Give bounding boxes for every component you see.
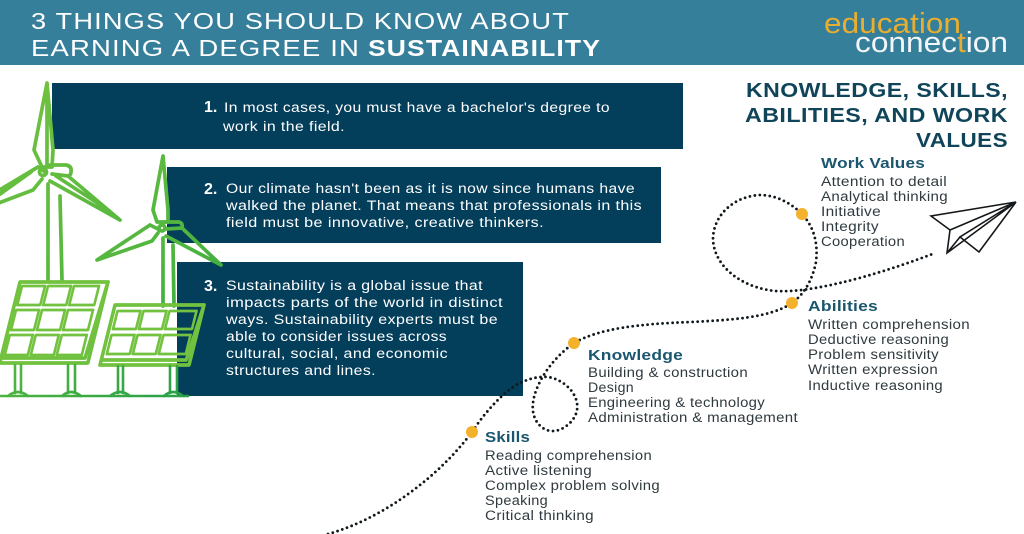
panel: fact 1: In most cases, you must have a bachelor's degree to bbox=[224, 100, 610, 115]
list: abilities: Deductive reasoning bbox=[808, 332, 949, 347]
panel: fact 3: Sustainability is a global issue that bbox=[226, 278, 483, 293]
panel: fact 3: able to consider issues across bbox=[226, 329, 447, 344]
logo: education connection: connec tion bbox=[855, 27, 1008, 59]
panel: fact 2: field must be innovative, creative thinkers. bbox=[226, 215, 544, 230]
list: skills: Reading comprehension bbox=[485, 448, 652, 463]
list: skills: Critical thinking bbox=[485, 508, 594, 523]
logo: education connection bbox=[824, 8, 1008, 59]
list: skills: Speaking bbox=[485, 493, 548, 508]
panel: fact 3: cultural, social, and economic bbox=[226, 346, 448, 361]
list: knowledge: Building & construction bbox=[588, 365, 748, 380]
heading: knowledge, skills, abilities and work values: ABILITIES, AND WORK bbox=[745, 104, 1008, 127]
marker: work values bbox=[796, 208, 808, 220]
panel: fact 2: Our climate hasn't been as it is now since humans have bbox=[226, 181, 635, 196]
heading: knowledge, skills, abilities and work values bbox=[745, 79, 1008, 152]
title bbox=[31, 8, 601, 61]
icon: small wind turbine bbox=[97, 156, 221, 306]
panel: fact 3: 3. bbox=[204, 278, 217, 295]
icon: small solar panel bbox=[100, 305, 204, 365]
list: abilities: Written comprehension bbox=[808, 317, 970, 332]
heading: knowledge, skills, abilities and work values: KNOWLEDGE, SKILLS, bbox=[746, 79, 1008, 102]
list: work values: Analytical thinking bbox=[821, 189, 948, 204]
panel: fact 2: walked the planet. That means that professionals in this bbox=[225, 198, 642, 213]
list: work values: Cooperation bbox=[821, 234, 905, 249]
list: work values: Work Values bbox=[821, 155, 925, 172]
title: EARNING A DEGREE IN bbox=[31, 35, 360, 61]
list: abilities bbox=[808, 298, 970, 393]
panel: fact 1: 1. bbox=[204, 99, 217, 116]
dotted flight path bbox=[328, 195, 935, 534]
illustration: wind turbines and solar panels bbox=[0, 83, 221, 396]
list: knowledge: Engineering & technology bbox=[588, 395, 765, 410]
list: work values: Initiative bbox=[821, 204, 881, 219]
panel: fact 3: structures and lines. bbox=[226, 363, 376, 378]
panel: fact 2: 2. bbox=[204, 181, 217, 198]
icon: large solar panel bbox=[0, 282, 108, 363]
list: abilities: Problem sensitivity bbox=[808, 347, 939, 362]
icon: panel stands and ground line bbox=[0, 365, 188, 396]
list: skills bbox=[485, 429, 660, 523]
icon: large wind turbine bbox=[0, 83, 120, 281]
panel: fact 1 bbox=[52, 83, 683, 149]
panel: fact 3: ways. Sustainability experts must be bbox=[225, 312, 498, 327]
title: 3 THINGS YOU SHOULD KNOW ABOUT bbox=[31, 8, 570, 34]
panel: fact 3: impacts parts of the world in distinct bbox=[226, 295, 503, 310]
list: work values: Attention to detail bbox=[821, 174, 947, 189]
icon: paper plane bbox=[931, 202, 1016, 253]
marker: abilities bbox=[786, 297, 798, 309]
logo: education connection: education bbox=[824, 8, 961, 40]
title: SUSTAINABILITY bbox=[368, 35, 601, 61]
list: knowledge: Knowledge bbox=[588, 347, 683, 364]
list: knowledge: Administration & management bbox=[588, 410, 798, 425]
list: knowledge bbox=[588, 347, 798, 425]
list: abilities: Written expression bbox=[808, 362, 938, 377]
list: skills: Active listening bbox=[485, 463, 592, 478]
list: skills: Skills bbox=[485, 429, 530, 446]
list: abilities: Inductive reasoning bbox=[808, 378, 943, 393]
heading: knowledge, skills, abilities and work values: VALUES bbox=[916, 129, 1008, 152]
marker: skills bbox=[466, 426, 478, 438]
list: work values: Integrity bbox=[821, 219, 879, 234]
list: knowledge: Design bbox=[588, 380, 634, 395]
panel: fact 3 bbox=[177, 262, 523, 396]
list: skills: Complex problem solving bbox=[485, 478, 660, 493]
list: abilities: Abilities bbox=[808, 298, 878, 315]
marker: knowledge bbox=[568, 337, 580, 349]
list: work values bbox=[821, 155, 948, 249]
header banner bbox=[0, 0, 1024, 65]
panel: fact 2 bbox=[167, 167, 661, 243]
panel: fact 1: work in the field. bbox=[222, 119, 345, 134]
